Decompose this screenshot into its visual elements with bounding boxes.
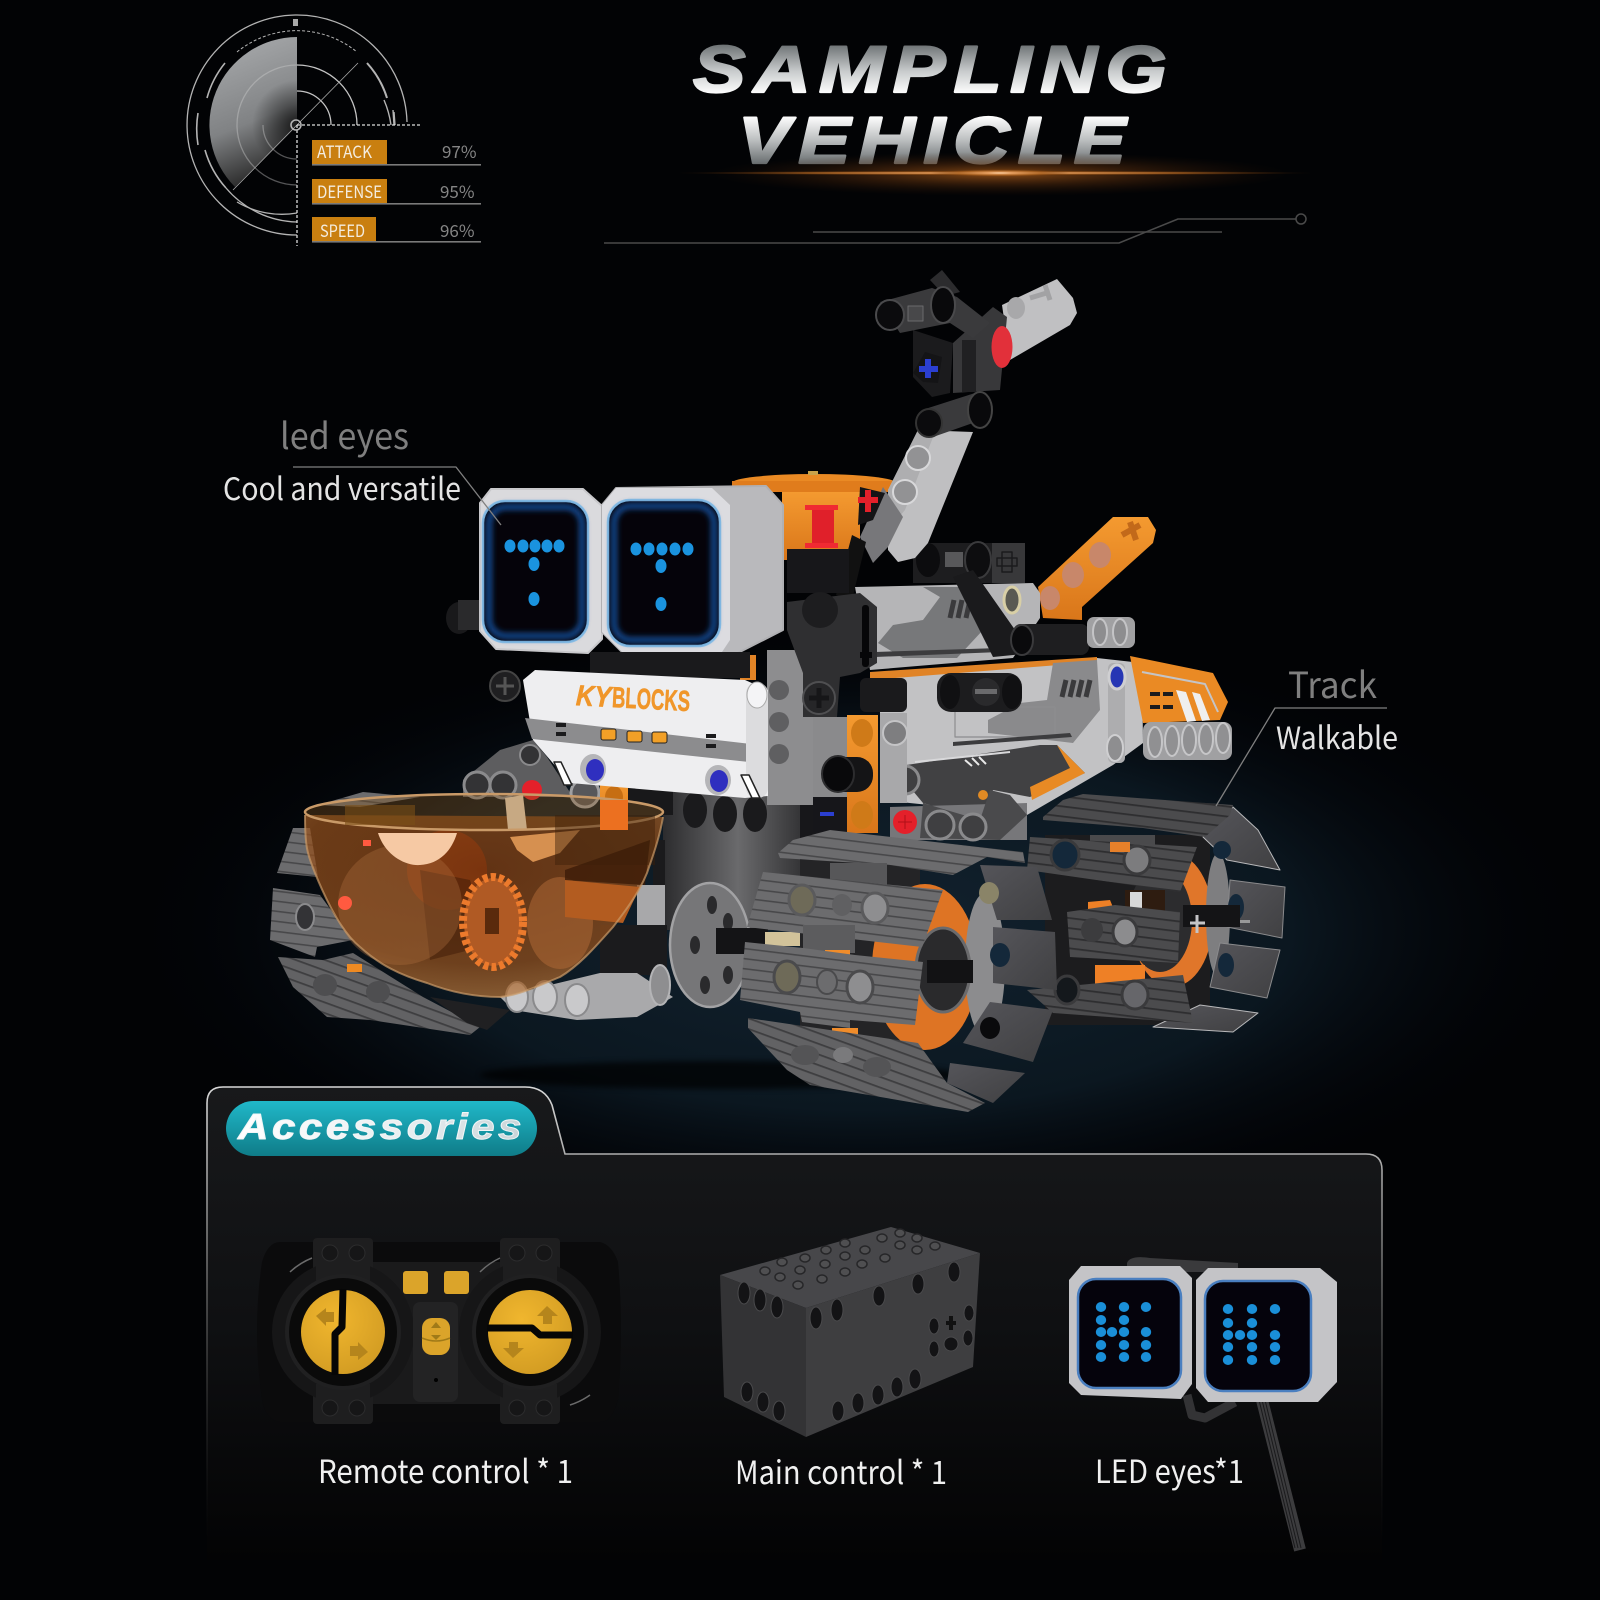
remote control bbox=[257, 1238, 621, 1424]
orange top disc bbox=[732, 471, 896, 560]
title glow bbox=[675, 152, 1315, 196]
upper camo body bbox=[855, 570, 1135, 670]
amber bowl bbox=[305, 794, 663, 997]
stat: defense: 95% bbox=[440, 178, 475, 203]
led eye module: right bbox=[602, 486, 783, 658]
title: VEHICLE bbox=[738, 103, 1134, 177]
title: SAMPLING bbox=[693, 32, 1175, 106]
radar gauge bbox=[187, 15, 422, 246]
stat: defense: DEFENSE bbox=[317, 178, 382, 203]
accessories heading pill bbox=[226, 1101, 537, 1156]
side columns and connectors bbox=[446, 505, 907, 833]
circuit lines bbox=[604, 214, 1306, 243]
stat: defense bbox=[312, 178, 481, 205]
front track wheel bbox=[740, 830, 1057, 1112]
accessories heading pill: Accessories bbox=[237, 1106, 525, 1147]
stat: speed: 96% bbox=[440, 217, 475, 242]
sensor arm bbox=[836, 270, 1077, 600]
led eye module: left bbox=[480, 489, 602, 653]
callout: led eyes: Cool and versatile bbox=[223, 464, 461, 509]
vehicle shadow bbox=[480, 1061, 960, 1089]
orange tilted beam bbox=[1038, 517, 1156, 620]
back plate and lower frame bbox=[463, 740, 850, 1020]
kyblocks logo: BLOCKS bbox=[611, 682, 691, 718]
stat: attack: 97% bbox=[442, 138, 477, 163]
callout: led eyes: led eyes bbox=[280, 408, 409, 460]
title bbox=[693, 32, 1175, 177]
stat: attack: ATTACK bbox=[317, 138, 372, 163]
panel: accessories bbox=[207, 1087, 1382, 1560]
callout: track bbox=[1216, 657, 1398, 806]
remote control label: Remote control * 1 bbox=[318, 1447, 573, 1493]
lower camo body bbox=[870, 656, 1232, 840]
kyblocks logo bbox=[575, 680, 691, 718]
callout: track: Walkable bbox=[1276, 713, 1398, 758]
front white panel bbox=[523, 652, 768, 798]
callout: led eyes bbox=[223, 408, 501, 525]
pulley wheel bbox=[670, 883, 802, 1007]
callout: track: Track bbox=[1288, 657, 1377, 709]
stat: speed bbox=[312, 217, 481, 243]
stat: attack bbox=[312, 138, 481, 166]
main control label: Main control * 1 bbox=[735, 1448, 947, 1494]
led eyes accessory bbox=[1069, 1257, 1337, 1550]
rear connector block bbox=[913, 542, 1025, 583]
led eyes label: LED eyes*1 bbox=[1095, 1447, 1244, 1493]
main control box bbox=[720, 1227, 980, 1437]
rear track wheel bbox=[1027, 794, 1285, 1032]
left track bbox=[270, 792, 510, 1035]
kyblocks logo: KY bbox=[575, 680, 614, 714]
stat: speed: SPEED bbox=[320, 217, 365, 242]
